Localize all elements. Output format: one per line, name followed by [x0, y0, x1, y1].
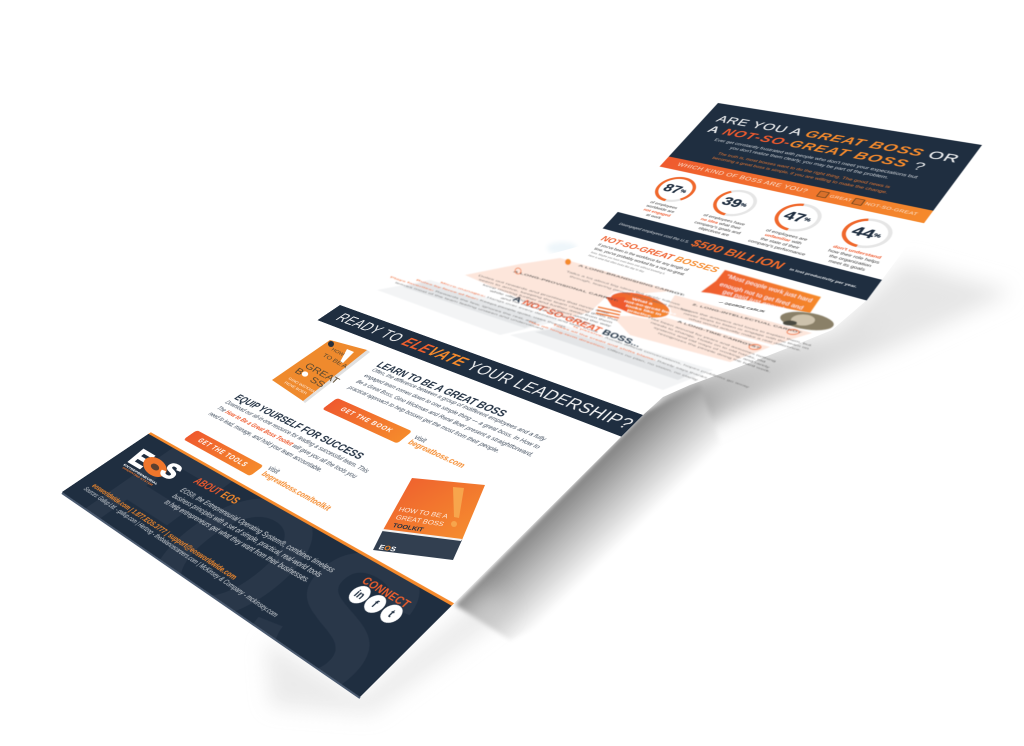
- text: visit: visit: [412, 434, 429, 444]
- text: pink right upper: 2. LONG-INTELLECTUAL CARROT: [691, 303, 803, 335]
- icon: light bulb: [596, 286, 680, 324]
- caption 87: at work: [645, 213, 662, 220]
- callout: quote: [701, 270, 821, 313]
- text: gray left: Rewards the few, ignores the rest, and: [433, 290, 537, 324]
- text: pink top: A LONG-BRANDISHING CARROT:: [577, 264, 686, 297]
- orange stripe: [148, 432, 454, 606]
- panel: header: [669, 103, 982, 211]
- upper page section: [587, 102, 982, 301]
- icon: linkedin: in: [351, 588, 368, 602]
- chart: 39 percent ring: [712, 190, 757, 216]
- caption 44: meet its goals: [827, 259, 866, 272]
- footer edge: [62, 493, 360, 698]
- caption 39: no idea what their: [699, 217, 742, 230]
- image: how to be a great boss book: B: [292, 367, 306, 377]
- text: intro small: Here is what that often looks like day to day.: [587, 254, 645, 273]
- text: gray right: Rarely says thanks: [655, 359, 709, 380]
- icon: light bulb: What a: [631, 297, 653, 306]
- logo ring O: [140, 453, 170, 481]
- logo line two: OPERATING SYSTEM: [121, 466, 154, 487]
- heading: connect: CONNECT: [358, 575, 414, 611]
- logo letter S: S: [153, 458, 188, 485]
- chart: 47 percent ring: [774, 203, 822, 232]
- stat: 500 billion: $500 BILLION: [688, 237, 787, 272]
- heading: about eos: ABOUT EOS: [190, 476, 243, 506]
- text: pink top body: Talks a lot about big ideas but rarely follows: [566, 270, 682, 306]
- caption 44: the organization: [828, 254, 873, 268]
- icon: carrot outline right upper: [787, 330, 799, 334]
- text: pink left: A LONG-PROVISIONAL CARROT:: [512, 270, 620, 303]
- text: pink left body: while offering little real support along the way: [489, 290, 612, 328]
- text: equip: The How to Be a Great Boss Toolkit will give you all the tools you: [215, 405, 360, 479]
- icon: carrot outline right lower: [749, 344, 761, 350]
- text: about eos: business principles with a set of simple, practical, real-world tools: [170, 492, 325, 579]
- subtitle: you don't realize them clearly, you may be part of the problem.: [729, 146, 890, 180]
- text: pink top body: through, leaving people unsure about priorities.: [569, 275, 693, 313]
- image: how to be a great boss book: GREAT: [302, 362, 341, 386]
- text: about eos: EOS®, the Entrepreneurial Operating System®, combines timeless: [178, 486, 338, 574]
- text: gray left: Hangs over every decision and task, trusts: [485, 296, 599, 333]
- heading: READY TO ELEVATE YOUR LEADERSHIP?: [332, 311, 639, 432]
- label not-so-great: NOT-SO-GREAT: [864, 201, 919, 217]
- image: how to be a great boss book: RENÉ BOER: [283, 380, 308, 395]
- text: learn: engaged team comes down to one simple thing — a great boss. In How to: [362, 373, 542, 450]
- text: pink left body: seem to arrive, keeping the team chasing goals that: [478, 278, 619, 322]
- title line 2: A NOT-SO-GREAT BOSS ?: [705, 124, 929, 173]
- title line 1: ARE YOU A GREAT BOSS OR: [714, 114, 963, 165]
- image: how to be a great boss book: HOW: [330, 347, 345, 358]
- caption 87: not engaged: [642, 208, 672, 218]
- lower page section: [62, 305, 643, 697]
- heading: equip yourself: EQUIP YOURSELF FOR SUCCESS: [231, 393, 368, 461]
- image: how to be a great boss book: GINO WICKMAN: [287, 376, 319, 395]
- text: cost lead-in: Disengaged employees cost the U.S.: [618, 222, 691, 244]
- link: toolkit: begreatboss.com/toolkit: [259, 470, 333, 513]
- caption 47: of employees are: [765, 228, 809, 242]
- image: how to be a great boss book: SS: [307, 376, 327, 390]
- caption 87: [642, 200, 679, 220]
- link: begreatboss: begreatboss.com: [406, 439, 467, 470]
- image: toolkit booklet: [373, 478, 485, 560]
- image: toolkit booklet: EOS: [377, 543, 398, 553]
- text: gray right: Avoids difficult conversations, hopes problems go away: [602, 336, 751, 389]
- heading: WHICH KIND OF BOSS ARE YOU?: [676, 162, 810, 194]
- icon: light bulb: practice: [626, 309, 652, 318]
- stat 87: 87%: [660, 182, 688, 196]
- paper sheet: [62, 103, 982, 697]
- icon: carrot outline top: [565, 259, 571, 265]
- image: how to be a great boss book: TO BE A: [321, 353, 349, 370]
- logo line one: ENTREPRENEURIAL: [122, 463, 159, 486]
- text: gray left: Keeps people quiet, uses threats: [478, 298, 567, 328]
- checkbox great: [816, 191, 830, 198]
- text: equip: Download our all-in-one resource for leading a successful team. This: [223, 399, 372, 474]
- text: learn: Be a Great Boss, Gino Wickman and René Boer present a straightforward,: [354, 379, 536, 458]
- text: about eos: to help entrepreneurs get what they want from their businesses.: [162, 498, 313, 584]
- text: pink right lower body: systems and old ways of working, and rarely: [653, 326, 771, 369]
- text: pink right lower body: Has been around for years and assumes nothing: [647, 316, 777, 363]
- icon: carrot outline left: [515, 268, 521, 274]
- button: get the tools: [183, 430, 264, 476]
- caption 87: worldwide are: [645, 204, 676, 214]
- panel: footer: [62, 432, 454, 697]
- text: pink right lower body: needs to change. Holds on to old habits, old: [650, 321, 766, 364]
- caption 44: [827, 244, 883, 272]
- text: gray left: Micro-manages:: [440, 281, 487, 298]
- stat 47: 47%: [780, 209, 812, 225]
- caption 39: company's goals and: [693, 220, 742, 235]
- text: intro small: boss. Maybe you have even been one without knowing it.: [590, 251, 666, 275]
- panel: gray box left: [377, 280, 563, 335]
- panel: ready to elevate band: [318, 305, 643, 437]
- quote line 3: get paid just enough: [721, 289, 787, 313]
- photo: portrait: [779, 309, 835, 333]
- caption 87: of employees: [649, 200, 679, 210]
- text: cost tail: in lost productivity per year.: [788, 267, 858, 289]
- icon: twitter: t: [385, 608, 398, 620]
- shadow: below the fold: [265, 242, 1012, 714]
- image: toolkit booklet: HOW TO BE A: [397, 505, 450, 520]
- text: pink right lower body: recognizes the people doing the hard work.: [657, 332, 771, 373]
- text: intro: If you've been in the workforce for any length of: [597, 243, 690, 272]
- checkbox not-so-great: [851, 198, 866, 206]
- caption 39: objectives are: [697, 226, 730, 237]
- text: pink left body: Doles out rewards and promises that never quite: [477, 274, 610, 315]
- panel: pink box right upper: [663, 295, 812, 345]
- panel: pink box right lower: [612, 316, 770, 362]
- image: toolkit booklet: TOOLKIT: [391, 523, 426, 533]
- panel: 500 billion band: [603, 212, 882, 300]
- caption 47: company's performance: [747, 239, 807, 257]
- caption 39: of employees have: [702, 213, 746, 227]
- logo letter E: E: [122, 444, 161, 473]
- heading: not-so-great bosses: NOT-SO-GREAT BOSSES: [599, 234, 721, 274]
- button: get the book: [322, 398, 412, 444]
- icon: facebook: [360, 592, 391, 616]
- text: pink left body: and no clear direction for the future.: [500, 297, 597, 327]
- chart: 87 percent ring: [654, 176, 697, 202]
- quote line 2: enough not to get fired and: [718, 282, 805, 311]
- label great: GREAT: [828, 194, 854, 203]
- caption 47: unfamiliar with: [764, 233, 803, 245]
- caption 47: the state of their: [759, 237, 801, 250]
- text: visit toolkit: visit: [265, 464, 282, 475]
- text: pink right upper body: never stops to listen or engage with the team on: [683, 312, 810, 350]
- icon: twitter: [376, 601, 407, 626]
- image: toolkit booklet: GREAT BOSS: [394, 513, 446, 528]
- icon: linkedin: [344, 583, 375, 607]
- section: not-so-great boss diagram: [377, 258, 813, 397]
- icon: light bulb: not-so-great boss: [623, 300, 677, 316]
- icon: light bulb: looks like in: [625, 304, 662, 317]
- button: get the tools: GET THE TOOLS: [195, 437, 251, 469]
- text: pink right lower: A LONG-TIME CARROTS?: [676, 320, 761, 350]
- panel: which kind of boss band: [660, 156, 933, 223]
- text: intro: time, you've probably worked for a not-so-great: [593, 247, 685, 276]
- text: gray left: leaves most of the team feeling unseen and undervalued.: [395, 281, 545, 331]
- text: contact: eosworldwide.com | 1.877.EOS.3777 | support@eosworldwide.com: [90, 482, 240, 581]
- text: pink right upper body: what would actually make a real difference.: [688, 317, 802, 352]
- quote line 1: “Most people work just hard: [725, 274, 814, 304]
- stat 39: 39%: [719, 195, 748, 210]
- button: get the book: GET THE BOOK: [338, 406, 396, 434]
- icon: facebook: f: [369, 598, 382, 610]
- text: gray right: Offers no plan, no vision, no clarity: [605, 347, 699, 382]
- text: gray right: Takes all the credit and shifts blame:: [552, 324, 657, 362]
- text: pink right upper body: Knows the answers and loves to explain them, but: [680, 307, 813, 347]
- caption 39: [693, 213, 746, 237]
- chart: 44 percent ring: [841, 218, 893, 248]
- caption 44: how their role helps: [827, 248, 881, 265]
- subtitle orange: The truth is, most bosses want to do the right thing. The good news is: [716, 152, 892, 189]
- text: learn: practical approach to help bosses get the most from their people.: [346, 385, 503, 454]
- heading: learn to be a great boss: LEARN TO BE A GREAT BOSS: [374, 360, 510, 419]
- subtitle orange: becoming a great boss is simple, if you are willing to make the change.: [711, 156, 889, 195]
- image: how to be a great boss book: [272, 340, 370, 403]
- text: gray right: Is passive:: [572, 325, 605, 338]
- text: gray left: Plays favorites:: [389, 276, 435, 292]
- text: learn: Often, the difference between a group of indifferent employees and a fully: [370, 367, 548, 442]
- text: pink left body: keep moving further and further away from them: [482, 284, 613, 324]
- panel: gray box right: [510, 325, 713, 390]
- caption 44: don't understand: [832, 244, 883, 260]
- heading: a not-so-great boss: A NOT-SO-GREAT BOSS...: [510, 295, 643, 349]
- subtitle: Ever get constantly frustrated with people who don't meet your expectations but: [713, 138, 919, 179]
- stat 44: 44%: [848, 224, 883, 241]
- text: sources: Sources: Gallup Ltd. - gallup.com | Hertzog - thebalancecareers.com | McKinsey & Company - mckinsey.com: [82, 486, 280, 619]
- text: gray right: Has no long-term direction:: [528, 320, 607, 350]
- text: equip: need to lead, manage, and hold your team accountable.: [207, 411, 325, 473]
- panel: pink box top left: [465, 258, 673, 318]
- quote attribution: — GEORGE CARLIN: [717, 300, 766, 313]
- caption 47: [747, 228, 809, 257]
- text: gray left: Rules by force of fear:: [416, 279, 480, 301]
